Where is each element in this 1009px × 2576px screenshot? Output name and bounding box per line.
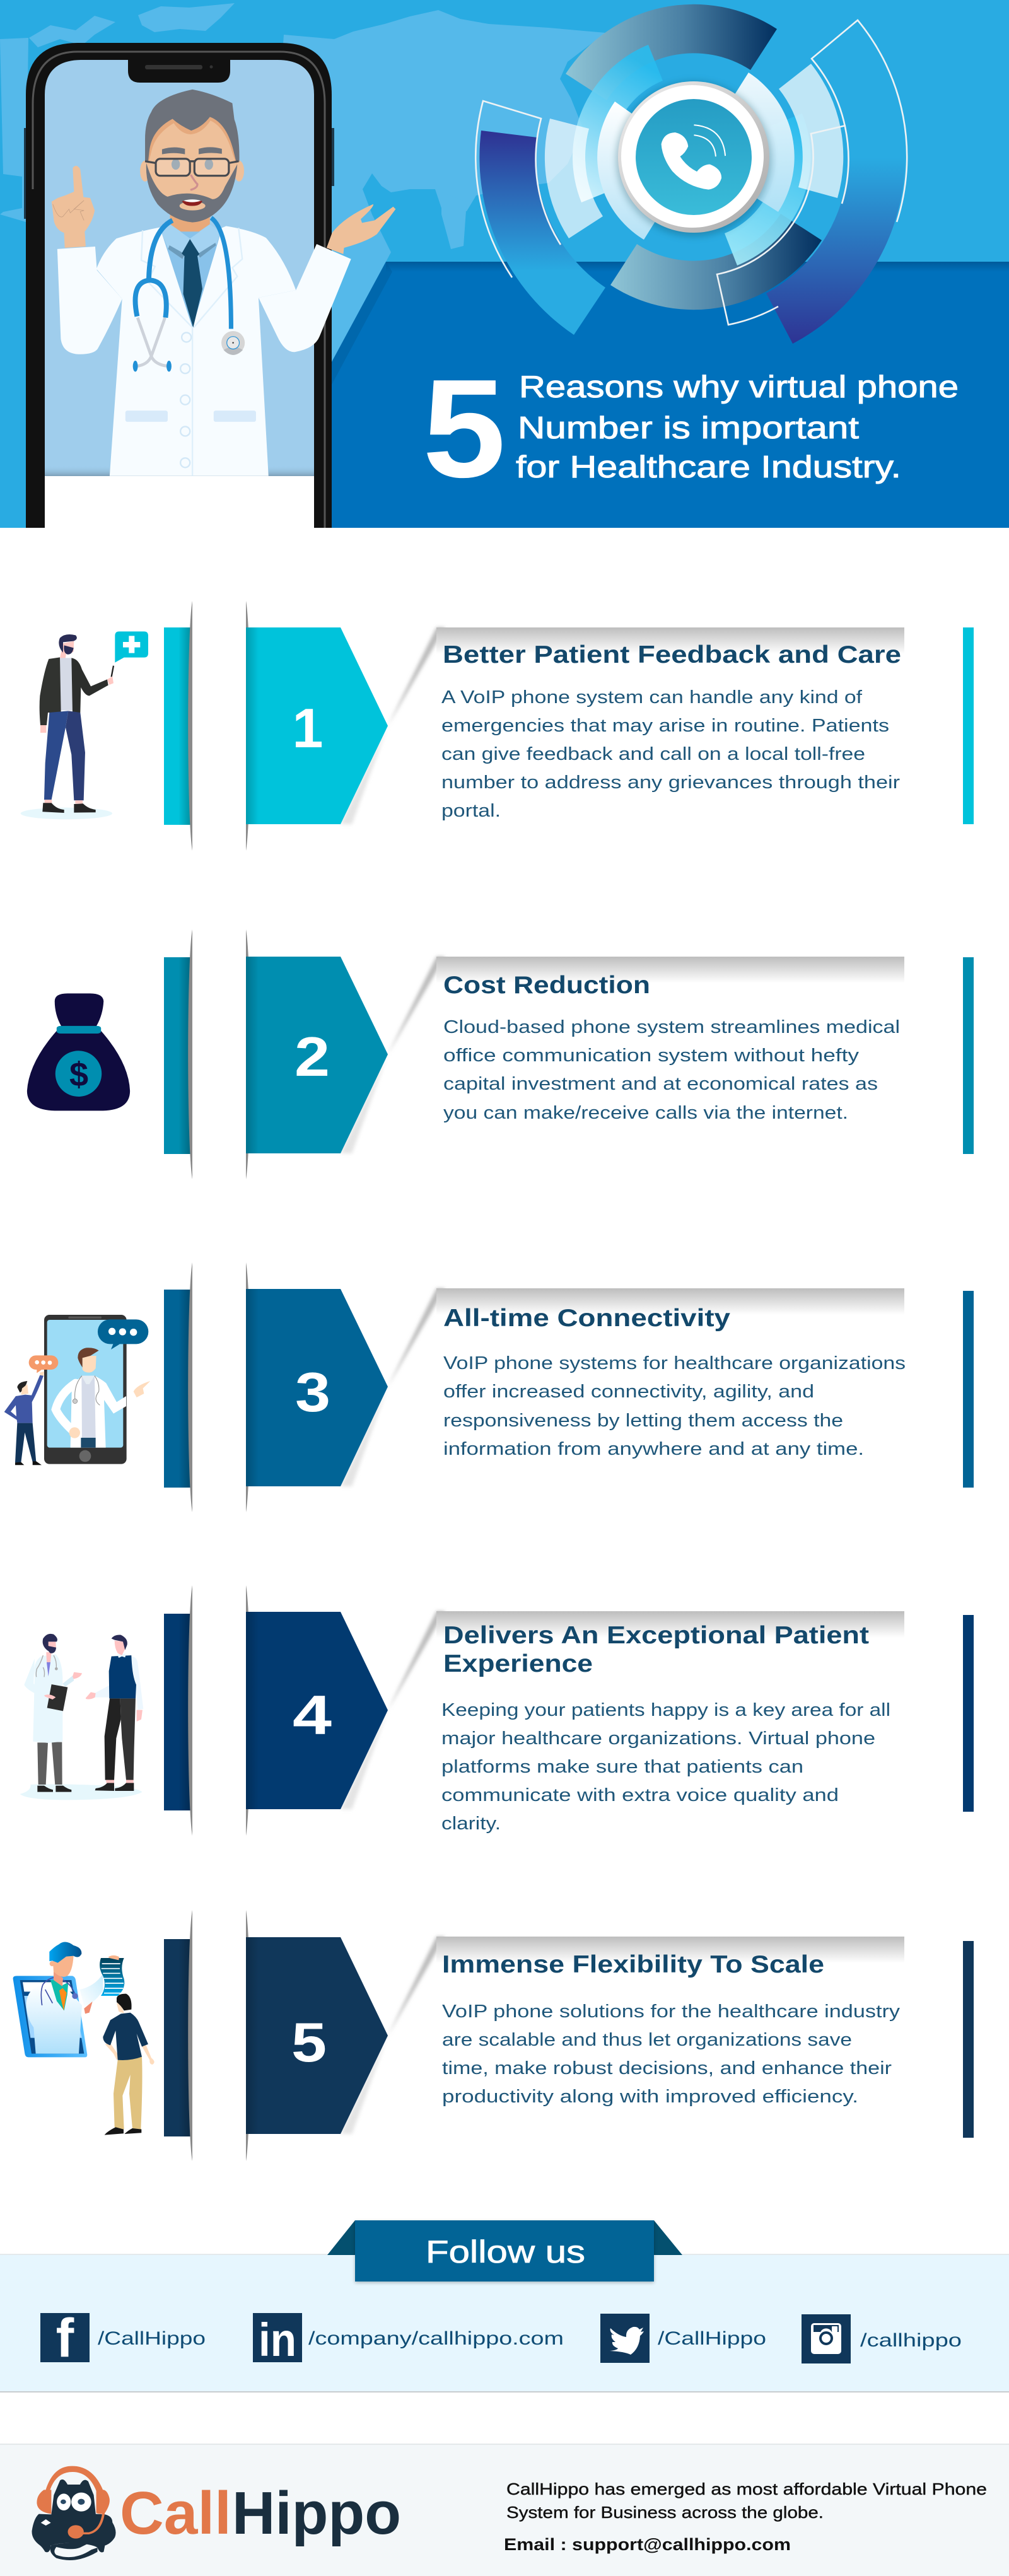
body text: VoIP phone solutions for the healthcare industry	[442, 2002, 901, 2022]
shirt and collar	[161, 231, 221, 327]
left hand	[52, 166, 95, 248]
right bar	[963, 1291, 974, 1488]
cyan ring segment lower right	[725, 114, 810, 265]
left bar	[164, 1614, 192, 1810]
body text: responsiveness by letting them access the	[443, 1411, 843, 1431]
body text: Cloud-based phone system streamlines medical	[443, 1017, 900, 1037]
pale segment left	[545, 119, 603, 238]
panel: reason 1: 1	[293, 697, 323, 759]
body text: you can make/receive calls via the internet.	[443, 1103, 848, 1123]
pockets	[125, 411, 168, 422]
body text: A VoIP phone system can handle any kind of	[441, 687, 863, 708]
twitter link	[600, 2314, 766, 2363]
panel: reason 4	[20, 1585, 974, 1836]
folded ribbon	[188, 930, 250, 1179]
dark blue title area	[332, 262, 1009, 528]
icon: man with medical speech bubble	[21, 631, 148, 819]
heading: Immense Flexibility To Scale	[442, 1951, 824, 1978]
circular phone graphic	[475, 4, 907, 344]
icon: money bag: $	[69, 1056, 88, 1093]
icon: phone handset	[662, 125, 725, 190]
body text: VoIP phone systems for healthcare organizations	[443, 1353, 906, 1373]
email: Email : support@callhippo.com	[504, 2535, 791, 2554]
folded ribbon	[188, 601, 250, 851]
heading: Cost Reduction	[443, 972, 650, 999]
body text	[443, 1353, 906, 1459]
icon: doctor on tablet with patient	[13, 1942, 155, 2135]
card shadow	[388, 1611, 445, 1710]
outer blue band right	[766, 21, 905, 344]
arrow with number	[246, 1289, 388, 1486]
arrow with number	[246, 1612, 388, 1809]
body text: are scalable and thus let organizations save	[442, 2030, 852, 2050]
arrow with number	[246, 627, 388, 824]
left bar	[164, 1290, 192, 1488]
body text: information from anywhere and at any time.	[443, 1439, 864, 1459]
folded ribbon	[188, 1585, 250, 1836]
company description: CallHippo has emerged as most affordable Virtual Phone	[506, 2480, 987, 2498]
callhippo logo	[32, 2466, 401, 2560]
arrow with number	[246, 1937, 388, 2134]
body text: platforms make sure that patients can	[441, 1757, 803, 1777]
body text	[443, 1017, 900, 1123]
instagram link: /callhippo	[860, 2330, 962, 2351]
glasses	[145, 159, 238, 176]
body text: office communication system without hefty	[443, 1046, 860, 1066]
panel: reason 5	[13, 1910, 974, 2161]
panel: footer	[0, 2444, 1009, 2576]
panel: reason 3	[4, 1262, 974, 1512]
title text: for Healthcare Industry.	[516, 450, 901, 484]
left bar	[164, 627, 192, 825]
stethoscope	[133, 218, 245, 371]
linkedin link	[253, 2313, 564, 2366]
beard	[146, 163, 237, 223]
arrow with number	[246, 957, 388, 1153]
facebook link: /CallHippo	[98, 2328, 206, 2349]
world map background	[0, 3, 605, 362]
right bar	[963, 1615, 974, 1812]
necktie	[182, 239, 202, 327]
body text	[441, 687, 900, 821]
head	[140, 161, 150, 182]
panel: reason 3: 3	[295, 1361, 330, 1423]
title text: Reasons why virtual phone	[519, 370, 959, 404]
left bar	[164, 957, 192, 1154]
panel: reason 2: 2	[295, 1025, 330, 1088]
panel: hero header	[0, 0, 1009, 528]
panel: follow us	[0, 2220, 1009, 2392]
icon: doctor and patient talking	[20, 1634, 143, 1800]
pale segment right	[779, 64, 843, 198]
card shadow	[388, 627, 445, 726]
body text	[442, 2002, 901, 2107]
cyan ring segment upper left	[573, 45, 663, 202]
right bar	[963, 1941, 974, 2138]
body text: portal.	[441, 801, 501, 821]
heading: Better Patient Feedback and Care	[443, 641, 901, 668]
nose	[191, 175, 197, 190]
heading: Delivers An Exceptional Patient	[443, 1622, 869, 1649]
body text: emergencies that may arise in routine. Patients	[441, 716, 889, 736]
outline left	[475, 101, 561, 277]
title text: Number is important	[518, 411, 859, 445]
company description	[506, 2480, 987, 2522]
card shadow	[388, 1288, 445, 1387]
top dark ring segment	[566, 4, 777, 100]
body text: number to address any grievances through their	[441, 772, 900, 793]
facebook link: f	[56, 2308, 74, 2369]
body text: Keeping your patients happy is a key area for all	[441, 1700, 890, 1720]
folded ribbon	[188, 1910, 250, 2161]
twitter link: /CallHippo	[658, 2328, 766, 2349]
panel: reason 2	[27, 930, 974, 1179]
body text: can give feedback and call on a local toll-free	[441, 744, 865, 764]
linkedin link: in	[259, 2314, 296, 2366]
outline right	[812, 20, 907, 222]
body text: capital investment and at economical rates as	[443, 1074, 878, 1094]
linkedin link: /company/callhippo.com	[308, 2328, 564, 2349]
outer blue band left	[479, 131, 605, 335]
right bar	[963, 957, 974, 1154]
body text: productivity along with improved efficiency.	[442, 2087, 858, 2107]
body text: offer increased connectivity, agility, and	[443, 1382, 814, 1402]
coat buttons	[180, 332, 191, 467]
bottom dark ring segment	[610, 214, 822, 310]
folded ribbon	[188, 1262, 250, 1512]
phone mockup	[24, 43, 334, 528]
body text: communicate with extra voice quality and	[441, 1785, 839, 1805]
follow us banner: Follow us	[426, 2234, 585, 2270]
icon: doctor on phone screen	[4, 1315, 150, 1465]
heading	[443, 1622, 869, 1677]
neck	[170, 214, 210, 238]
title text	[516, 370, 959, 484]
heading: Experience	[443, 1650, 593, 1677]
right bar	[963, 627, 974, 824]
body text: clarity.	[441, 1814, 501, 1834]
panel: reason 5: 5	[291, 2011, 327, 2073]
lab coat	[96, 226, 296, 476]
white ring segment left	[597, 102, 656, 240]
eyes	[172, 159, 180, 170]
card shadow	[388, 957, 445, 1054]
callhippo logo: Hippo	[232, 2480, 401, 2547]
company description: System for Business across the globe.	[506, 2503, 824, 2522]
callhippo logo: Call	[120, 2480, 231, 2547]
follow us banner	[327, 2220, 682, 2283]
instagram link	[802, 2314, 962, 2363]
doctor illustration	[52, 90, 395, 476]
body text: time, make robust decisions, and enhance their	[442, 2058, 892, 2078]
body text: major healthcare organizations. Virtual phone	[441, 1728, 875, 1749]
title number 5: 5	[423, 351, 506, 507]
panel: reason 4: 4	[293, 1684, 332, 1746]
body text	[441, 1700, 890, 1834]
coat lapels	[141, 228, 242, 476]
facebook link	[40, 2308, 206, 2369]
mascot	[32, 2466, 116, 2560]
heading: All-time Connectivity	[443, 1305, 730, 1332]
outline lower right	[717, 125, 846, 325]
left bar	[164, 1939, 192, 2136]
icon: money bag	[27, 993, 130, 1110]
central button	[617, 81, 771, 236]
white ring segment right	[733, 73, 795, 212]
eyebrows	[162, 147, 222, 154]
right hand	[327, 204, 395, 254]
card shadow	[388, 1937, 445, 2036]
panel: reason 1	[21, 601, 974, 851]
